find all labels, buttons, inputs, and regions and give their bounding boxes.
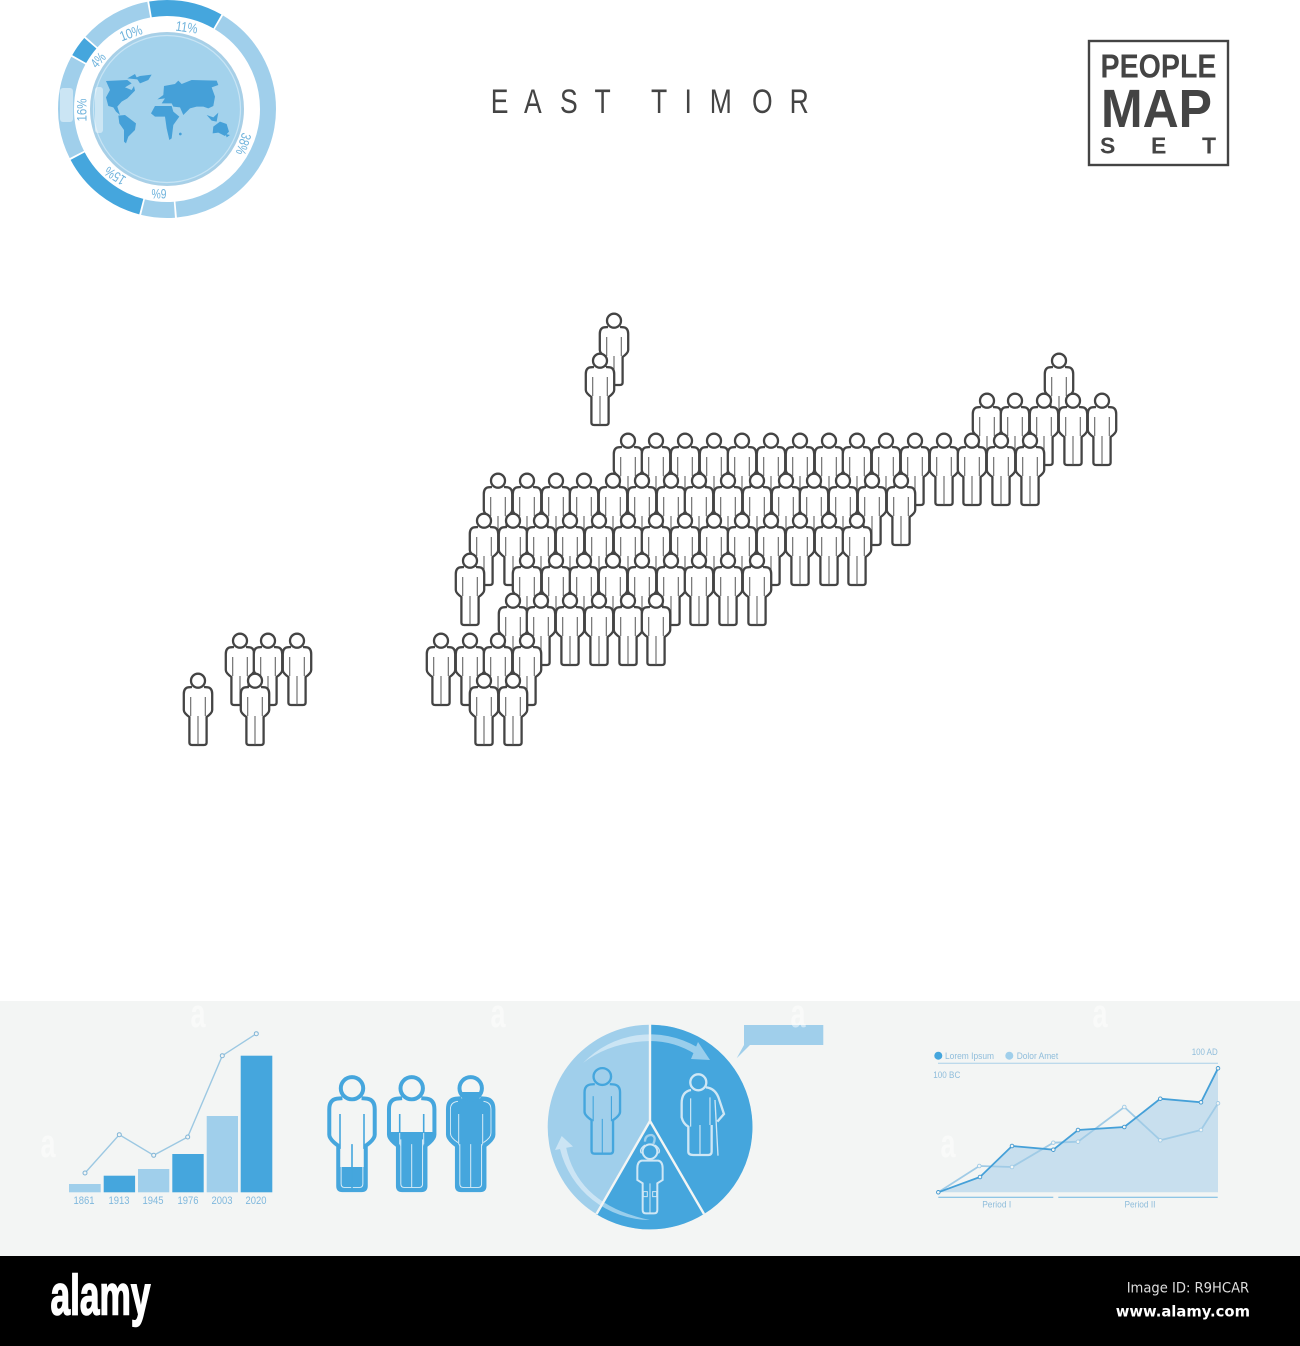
legend: 100 AD xyxy=(1192,1047,1218,1058)
icon: world donut chart xyxy=(60,8,268,210)
line series xyxy=(83,1032,258,1175)
percent labels xyxy=(74,18,255,202)
icon: elderly figure with cane xyxy=(682,1074,724,1156)
arrow: top xyxy=(583,1034,710,1063)
region: Atauro island figures xyxy=(586,314,628,425)
icon: figure full fill xyxy=(448,1077,493,1190)
period axis xyxy=(938,1197,1218,1211)
year labels xyxy=(74,1195,266,1207)
percent labels: 16% xyxy=(74,98,90,122)
year labels: 1913 xyxy=(108,1195,130,1207)
line chart: area trend xyxy=(933,1047,1220,1211)
icon: adult figure xyxy=(585,1068,620,1154)
badge: people map set: MAP xyxy=(1101,79,1212,139)
percent labels: 4% xyxy=(87,49,109,71)
icon group: three fill-level figures xyxy=(329,1077,493,1190)
watermark glyphs: a xyxy=(790,992,806,1036)
region: Oecusse enclave figures xyxy=(184,634,311,745)
badge: people map set: SET xyxy=(1100,132,1216,158)
watermark glyphs: a xyxy=(490,992,506,1036)
logo: alamy: alamy xyxy=(50,1264,151,1328)
title: EASTTIMOR xyxy=(491,83,809,121)
region: main island figures xyxy=(427,354,1116,745)
website: www.alamy.com xyxy=(1116,1303,1250,1321)
year labels: 1976 xyxy=(178,1195,198,1207)
watermark glyphs: a xyxy=(940,1122,956,1166)
watermark glyphs: a xyxy=(1092,992,1108,1036)
image id: Image ID: R9HCAR xyxy=(1127,1281,1249,1297)
badge: people map set xyxy=(1089,41,1228,165)
year labels: 1861 xyxy=(74,1195,94,1207)
icon: world map xyxy=(106,74,230,143)
icon: figure half fill xyxy=(389,1077,434,1190)
year labels: 1945 xyxy=(142,1195,164,1207)
legend: Lorem Ipsum xyxy=(945,1051,994,1062)
percent labels: 6% xyxy=(152,186,166,202)
callout: speech bubble xyxy=(737,1025,823,1058)
icon: child figure xyxy=(637,1135,663,1213)
icon: figure low fill xyxy=(329,1077,375,1190)
series: lorem ipsum xyxy=(936,1066,1220,1194)
watermark glyphs: a xyxy=(190,992,206,1036)
watermark glyphs xyxy=(40,992,1108,1166)
legend xyxy=(933,1047,1218,1081)
series: dolor amet xyxy=(938,1102,1220,1192)
arrow: bottom left xyxy=(555,1136,650,1220)
panel: bottom infographic band xyxy=(0,1001,1300,1256)
watermark glyphs: a xyxy=(40,1122,56,1166)
legend: 100 BC xyxy=(933,1070,960,1081)
percent labels: 38% xyxy=(233,131,255,157)
year labels: 2003 xyxy=(212,1195,232,1207)
percent labels: 15% xyxy=(101,163,129,189)
legend: Dolor Amet xyxy=(1017,1051,1059,1062)
year labels: 2020 xyxy=(246,1195,266,1207)
percent labels: 11% xyxy=(175,18,199,37)
pie chart: age groups xyxy=(548,1024,752,1229)
period axis: Period I xyxy=(982,1200,1011,1211)
badge: people map set: PEOPLE xyxy=(1100,48,1216,84)
map: people silhouettes of East Timor xyxy=(184,314,1116,745)
percent labels: 10% xyxy=(117,21,144,44)
period axis: Period II xyxy=(1124,1200,1156,1211)
bar chart: timeline xyxy=(69,1032,272,1207)
footer: black credit bar xyxy=(0,1256,1300,1346)
